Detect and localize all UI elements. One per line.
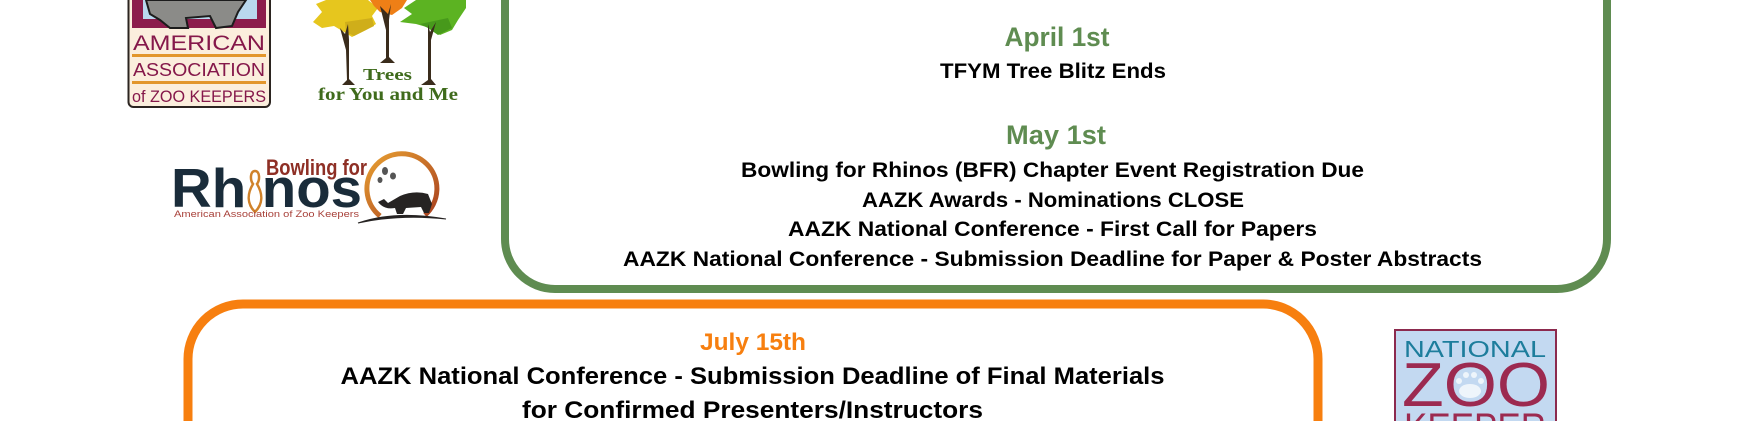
logo: American Association of Zoo Keepers [128,0,270,107]
text: May deadlines: Bowling for Rhinos (BFR) Chapter Event Registration Due [741,159,1364,182]
text: TFYM deadline: TFYM Tree Blitz Ends [940,60,1166,83]
text: May deadlines: AAZK National Conference - Submission Deadline for Paper & Poster Abstracts [623,248,1482,271]
panel: orange summer deadlines [188,304,1318,421]
heading: July 15th: July 15th [700,329,806,356]
logo: American Association of Zoo Keepers: AMERICAN [133,32,265,55]
logo: Trees for You and Me: for You and Me [318,84,458,104]
panel: green spring deadlines [505,0,1607,289]
logo: Bowling for Rhinos [171,154,446,223]
logo: Bowling for Rhinos: American Association of Zoo Keepers [174,209,360,219]
text: May deadlines: AAZK National Conference - First Call for Papers [788,218,1317,241]
text: July deadline: AAZK National Conference - Submission Deadline of Final Materials [340,363,1164,390]
logo: American Association of Zoo Keepers: ASSOCIATION [133,60,265,80]
logo: Bowling for Rhinos: Rhinos [171,157,362,219]
heading: April 1st: April 1st [1004,22,1110,52]
text: May deadlines [623,159,1482,271]
logo: National Zoo Keeper: ZOO [1402,351,1550,420]
text: May deadlines: AAZK Awards - Nominations CLOSE [862,189,1244,212]
logo: Bowling for Rhinos: Bowling for [266,155,367,180]
logo: Trees for You and Me: Trees [363,65,412,84]
text: July deadline [340,363,1164,421]
heading: May 1st: May 1st [1006,120,1106,150]
logo: American Association of Zoo Keepers: of ZOO KEEPERS [132,87,266,106]
logo: Trees for You and Me [313,0,466,104]
logo: National Zoo Keeper: NATIONAL [1404,336,1546,362]
logo: National Zoo Keeper [1395,330,1556,421]
